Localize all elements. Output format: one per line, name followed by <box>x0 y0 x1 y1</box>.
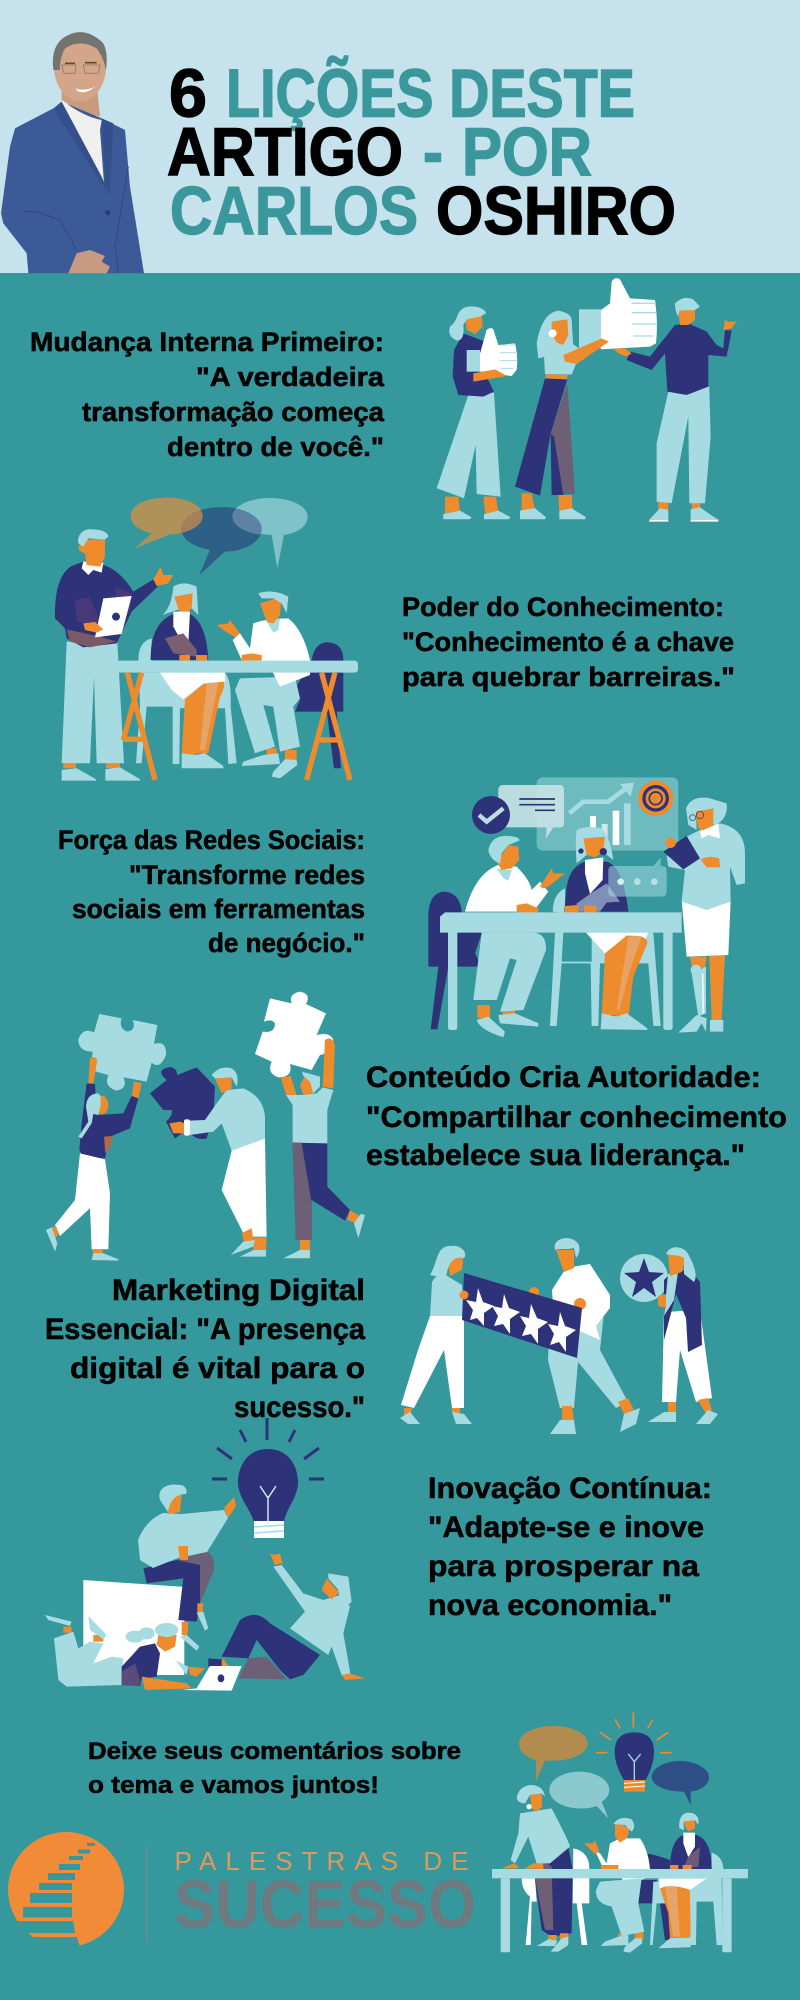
woman seated right <box>658 1813 712 1948</box>
illustration: meeting with speech bubbles <box>55 498 358 781</box>
logo: Palestras de Sucesso <box>0 1832 476 1948</box>
speech bubbles <box>131 498 308 575</box>
man standing <box>55 529 173 781</box>
logo emblem <box>0 1832 124 1948</box>
title: POR <box>462 114 592 190</box>
title <box>167 54 676 249</box>
lesson 5 text: sucesso." <box>234 1391 365 1424</box>
woman left <box>400 1246 472 1424</box>
laptop <box>182 1666 242 1691</box>
man on box torso <box>138 1484 236 1568</box>
chair behind woman <box>550 888 661 1026</box>
chat bubble with dots <box>608 857 667 897</box>
man with raised arms <box>281 1038 365 1258</box>
lesson 3 text: "Transforme redes <box>129 860 365 890</box>
lesson 3 text <box>58 825 365 958</box>
seated woman <box>564 827 648 1030</box>
man with puzzle <box>169 1067 267 1257</box>
lesson 6 text <box>428 1472 712 1622</box>
woman standing <box>502 1785 573 1952</box>
closing call to action: Deixe seus comentários sobre <box>88 1738 461 1765</box>
lesson 1 text <box>30 327 385 462</box>
title: - <box>423 114 443 190</box>
person left with like <box>437 306 517 519</box>
woman right with star <box>620 1247 718 1424</box>
man at table <box>217 591 310 778</box>
lesson 2 text: "Conhecimento é a chave <box>402 627 734 657</box>
white puzzle piece <box>255 992 333 1077</box>
closing call to action: o tema e vamos juntos! <box>88 1772 379 1799</box>
woman at table <box>151 583 225 768</box>
light bulb with rays <box>212 1418 324 1538</box>
logo divider <box>146 1847 148 1942</box>
lesson 3 text: de negócio." <box>208 928 365 958</box>
closing call to action <box>88 1738 461 1799</box>
title: 6 <box>169 56 207 132</box>
white box <box>83 1580 184 1675</box>
lesson 2 text: para quebrar barreiras." <box>402 662 735 692</box>
lesson 1 text: Mudança Interna Primeiro: <box>30 327 384 357</box>
lesson 4 text <box>366 1061 787 1172</box>
lesson 1 text: dentro de você." <box>167 432 384 462</box>
lesson 5 text: Marketing Digital <box>112 1274 365 1307</box>
lesson 5 text <box>45 1274 365 1424</box>
illustration: people with puzzle pieces <box>46 992 365 1261</box>
bubbles and bulb <box>519 1712 709 1818</box>
seated man <box>465 836 565 1037</box>
logo wordmark: PALESTRAS DE <box>174 1846 468 1876</box>
lesson 5 text: Essencial: "A presença <box>45 1313 365 1346</box>
lesson 4 text: "Compartilhar conhecimento <box>366 1101 787 1134</box>
dashboard panel <box>472 777 678 851</box>
woman lying <box>45 1615 205 1690</box>
person centre with like <box>515 278 657 519</box>
illustration: team with data dashboards <box>428 777 745 1037</box>
illustration: people holding star rating <box>400 1238 718 1434</box>
navy chair <box>637 1853 670 1940</box>
navy chair <box>294 642 343 768</box>
person right <box>613 298 737 522</box>
lesson 6 text: "Adapte-se e inove <box>428 1511 704 1544</box>
table <box>492 1869 748 1952</box>
lesson 6 text: Inovação Contínua: <box>428 1472 712 1505</box>
woman with puzzle <box>46 1057 142 1261</box>
lesson 1 text: transformação começa <box>82 397 385 427</box>
lesson 2 text: Poder do Conhecimento: <box>402 592 724 622</box>
lesson 3 text: sociais em ferramentas <box>72 894 365 924</box>
lesson 5 text: digital é vital para o <box>70 1352 365 1385</box>
man seated <box>584 1818 650 1953</box>
title: LIÇÕES DESTE <box>226 54 635 132</box>
title: CARLOS <box>170 173 418 249</box>
logo wordmark: SUCESSO <box>174 1866 476 1942</box>
white chair <box>522 1848 589 1945</box>
navy chair <box>428 892 482 1029</box>
lesson 6 text: para prosperar na <box>428 1550 700 1583</box>
header band <box>0 0 800 273</box>
standing woman <box>663 798 745 1033</box>
table <box>117 661 358 673</box>
light chair <box>650 1853 723 1945</box>
man centre <box>529 1238 640 1434</box>
light puzzle piece <box>78 1014 166 1091</box>
man on box legs <box>143 1552 214 1651</box>
illustration: people with thumbs up <box>437 278 737 522</box>
table legs <box>123 673 350 780</box>
lesson 6 text: nova economia." <box>428 1589 672 1622</box>
lesson 1 text: "A verdadeira <box>196 362 385 392</box>
lesson 3 text: Força das Redes Sociais: <box>58 825 365 855</box>
title: OSHIRO <box>436 173 676 249</box>
woman sitting <box>208 1553 365 1680</box>
navy puzzle piece <box>150 1067 215 1139</box>
portrait: Carlos Oshiro <box>1 32 144 273</box>
lesson 4 text: Conteúdo Cria Autoridade: <box>366 1061 761 1094</box>
star banner <box>460 1273 582 1358</box>
light chair <box>136 638 237 764</box>
title: ARTIGO <box>167 114 403 190</box>
illustration: team conversation and idea <box>492 1712 748 1953</box>
lesson 2 text <box>402 592 735 692</box>
illustration: team with light bulb <box>45 1418 365 1691</box>
lesson 4 text: estabelece sua liderança." <box>366 1139 745 1172</box>
table <box>440 912 682 1030</box>
